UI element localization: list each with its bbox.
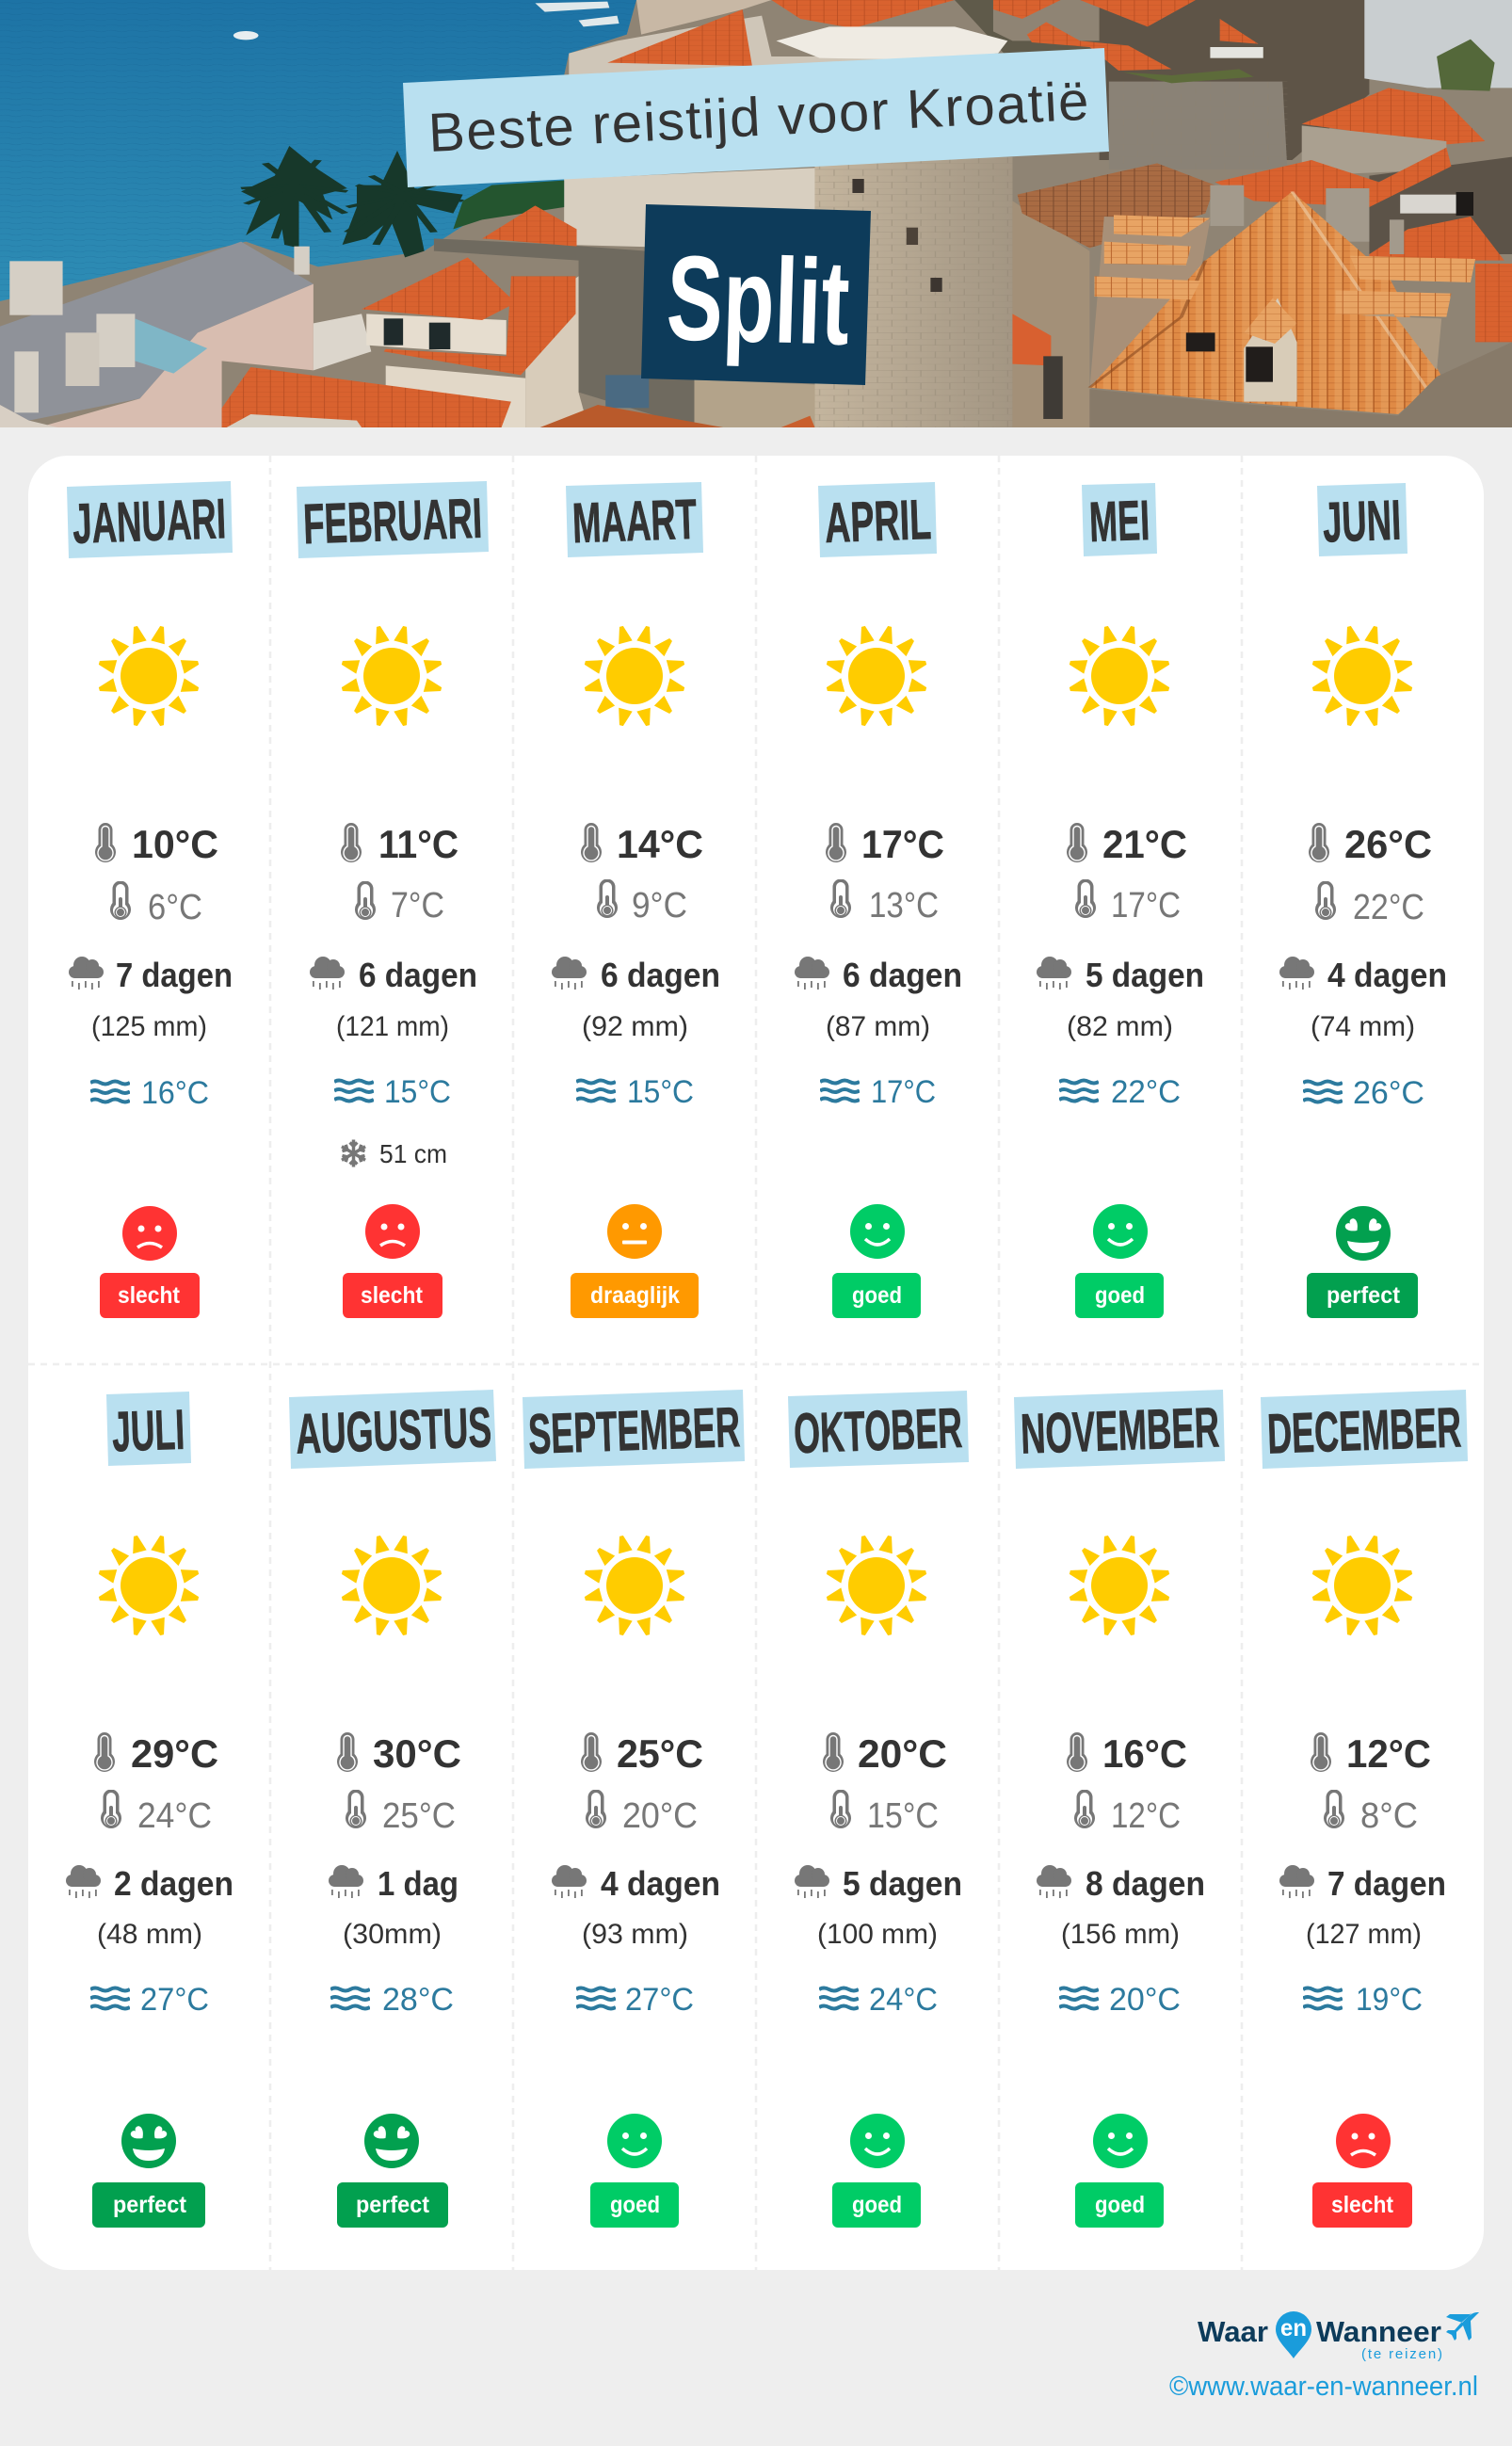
rainfall: (93 mm) [582, 1919, 688, 1950]
city label: Split [641, 204, 871, 385]
sea temperature [1303, 1075, 1424, 1111]
heading: juli [106, 1392, 191, 1466]
rain days: 6 dagen [843, 956, 962, 994]
sea temperature [90, 1075, 209, 1111]
rating: goed [832, 1273, 921, 1318]
rain days: 8 dagen [1086, 1864, 1205, 1903]
icon: happy face [1093, 1204, 1148, 1259]
min temperature [1324, 1789, 1418, 1836]
rating: perfect [92, 2182, 205, 2228]
snow depth: 51 cm [379, 1139, 447, 1168]
rain days: 4 dagen [1327, 956, 1447, 994]
logo: Waar en Wanneer: Wanneer [1316, 2315, 1441, 2348]
rain days: 5 dagen [1086, 956, 1204, 994]
rainfall: (121 mm) [336, 1011, 449, 1042]
rain days [795, 956, 962, 994]
rating: perfect [337, 2182, 448, 2228]
icon: sun [825, 1534, 928, 1637]
rating: slecht [343, 1273, 442, 1318]
min temperature: 13°C [869, 886, 939, 925]
max temperature: 25°C [617, 1731, 703, 1776]
max temperature [341, 822, 458, 866]
rating: slecht: slecht [118, 1282, 181, 1309]
heading: juni [1317, 483, 1407, 556]
logo: Waar en Wanneer: (te reizen) [1361, 2346, 1442, 2362]
month: oktober [788, 1391, 969, 2228]
heading: november: NOVEMBER [1020, 1395, 1220, 1466]
icon: heart-eyes face [364, 2114, 419, 2168]
rating: goed: goed [610, 2192, 660, 2218]
max temperature: 11°C [378, 822, 458, 866]
min temperature [586, 1789, 698, 1836]
month: maart [552, 482, 720, 1318]
icon: sun [97, 1534, 201, 1637]
min temperature: 20°C [622, 1796, 698, 1836]
min temperature: 24°C [137, 1796, 212, 1836]
rainfall: (125 mm) [91, 1011, 207, 1042]
icon: happy face [850, 1204, 905, 1259]
icon: happy face [1093, 2114, 1148, 2168]
sea temperature: 15°C [384, 1074, 451, 1110]
rain days [552, 1864, 720, 1903]
sea temperature: 26°C [1353, 1075, 1424, 1111]
rain days: 6 dagen [359, 956, 477, 994]
min temperature [1315, 881, 1424, 927]
sea temperature: 27°C [140, 1982, 209, 2018]
min temperature [110, 881, 202, 927]
rainfall: (127 mm) [1306, 1919, 1422, 1950]
rainfall: (30mm) [343, 1919, 442, 1950]
icon: happy face [607, 2114, 662, 2168]
max temperature [826, 822, 944, 866]
rainfall: (87 mm) [826, 1011, 930, 1042]
rain days: 7 dagen [116, 956, 233, 994]
sea temperature: 27°C [625, 1982, 694, 2018]
max temperature: 26°C [1344, 822, 1432, 866]
min temperature [355, 881, 444, 925]
sea temperature: 16°C [141, 1075, 209, 1111]
icon: location pin [1276, 2311, 1311, 2358]
rating: goed: goed [852, 2192, 902, 2218]
rating: perfect: perfect [1327, 1282, 1401, 1309]
icon: sun [1311, 624, 1414, 728]
icon: heart-eyes face [121, 2114, 176, 2168]
min temperature: 7°C [391, 886, 444, 925]
heading: januari [67, 481, 233, 558]
icon: sad face [122, 1206, 177, 1261]
rating: slecht [100, 1273, 200, 1318]
rain days [310, 956, 477, 994]
sea temperature [820, 1074, 936, 1110]
rain days: 7 dagen [1327, 1864, 1446, 1903]
min temperature: 17°C [1111, 886, 1181, 925]
icon: sun [340, 1534, 443, 1637]
heading: april [818, 482, 937, 557]
min temperature [1075, 879, 1181, 925]
heading: februari: FEBRUARI [302, 487, 483, 555]
rating: slecht: slecht [361, 1282, 424, 1309]
rating: goed [1075, 1273, 1164, 1318]
rain days: 4 dagen [601, 1864, 720, 1903]
rain days: 6 dagen [601, 956, 720, 994]
rain days [69, 956, 233, 994]
rating: draaglijk [571, 1273, 699, 1318]
min temperature: 9°C [632, 886, 687, 925]
hero photo: aerial view of Split [0, 0, 1512, 427]
max temperature: 14°C [617, 822, 703, 866]
icon: sun [97, 624, 201, 728]
rain days [795, 1864, 962, 1903]
heading: augustus [289, 1390, 496, 1469]
max temperature: 30°C [373, 1731, 461, 1776]
heading: mei: MEI [1088, 489, 1150, 554]
sea temperature [1303, 1982, 1423, 2018]
max temperature [1067, 822, 1187, 866]
min temperature: 22°C [1353, 888, 1424, 927]
sea temperature: 24°C [869, 1982, 938, 2018]
icon: sad face [1336, 2114, 1391, 2168]
sea temperature [576, 1982, 694, 2018]
rain days [1037, 956, 1204, 994]
min temperature [830, 879, 939, 925]
month: juni [1279, 483, 1447, 1318]
rain days [329, 1864, 458, 1903]
heading: oktober [788, 1391, 969, 1468]
icon: heart-eyes face [1336, 1206, 1391, 1261]
sea temperature [334, 1074, 451, 1110]
month: januari [67, 481, 233, 1318]
logo: Waar en Wanneer: Waar [1198, 2315, 1268, 2348]
sea temperature [1059, 1074, 1181, 1110]
month: mei [1037, 483, 1204, 1318]
min temperature: 15°C [867, 1796, 939, 1836]
heading: april: APRIL [824, 488, 932, 555]
rain days [1279, 956, 1447, 994]
rating: goed [590, 2182, 679, 2228]
max temperature [1311, 1731, 1431, 1776]
heading: februari [297, 481, 489, 558]
icon: sun [1068, 624, 1171, 728]
heading: oktober: OKTOBER [793, 1396, 963, 1465]
rating: goed: goed [852, 1282, 902, 1309]
min temperature [346, 1789, 456, 1836]
heading: augustus: AUGUSTUS [295, 1395, 492, 1466]
sea temperature [90, 1982, 209, 2018]
rating: perfect: perfect [113, 2192, 187, 2218]
max temperature: 12°C [1346, 1731, 1431, 1776]
rain days: 1 dag [378, 1864, 458, 1903]
icon: sad face [365, 1204, 420, 1259]
min temperature: 8°C [1360, 1796, 1418, 1836]
rating: goed [1075, 2182, 1164, 2228]
max temperature: 17°C [861, 822, 944, 866]
month: september [523, 1390, 745, 2228]
max temperature: 20°C [858, 1731, 947, 1776]
rainfall: (48 mm) [97, 1919, 202, 1950]
min temperature: 25°C [382, 1796, 456, 1836]
heading: september [523, 1390, 745, 1469]
snow depth [342, 1139, 447, 1168]
logo: Waar en Wanneer: en [1280, 2315, 1307, 2341]
max temperature: 10°C [132, 822, 218, 866]
max temperature [581, 822, 703, 866]
max temperature [581, 1731, 703, 1776]
sea temperature [576, 1074, 694, 1110]
title banner: Beste reistijd voor Kroatië: Beste reistijd voor Kroatië [426, 71, 1090, 164]
icon: sun [583, 624, 686, 728]
heading: juni: JUNI [1322, 489, 1402, 554]
min temperature: 12°C [1111, 1796, 1181, 1836]
rain days [1279, 1864, 1446, 1903]
rating: goed: goed [1095, 2192, 1145, 2218]
rainfall: (82 mm) [1067, 1011, 1173, 1042]
max temperature [95, 822, 218, 866]
month: augustus [289, 1390, 496, 2228]
icon: plane [1446, 2312, 1479, 2341]
rating: perfect [1307, 1273, 1418, 1318]
heading: juli: JULI [111, 1398, 185, 1463]
sea temperature: 28°C [382, 1982, 454, 2018]
icon: sun [340, 624, 443, 728]
sea temperature [330, 1982, 454, 2018]
rating: goed [832, 2182, 921, 2228]
sea temperature: 20°C [1109, 1982, 1181, 2018]
heading: maart [566, 482, 703, 557]
heading: mei [1082, 483, 1157, 556]
sea temperature: 17°C [871, 1074, 936, 1110]
min temperature: 6°C [148, 888, 202, 927]
heading: september: SEPTEMBER [527, 1395, 741, 1466]
min temperature [101, 1789, 212, 1836]
min temperature [830, 1789, 939, 1836]
rain days [1037, 1864, 1205, 1903]
max temperature: 16°C [1102, 1731, 1187, 1776]
max temperature: 21°C [1102, 822, 1187, 866]
heading: november [1014, 1390, 1225, 1469]
rating: goed: goed [1095, 1282, 1145, 1309]
rating: perfect: perfect [356, 2192, 430, 2218]
icon: sun [1311, 1534, 1414, 1637]
rating: slecht: slecht [1331, 2192, 1394, 2218]
rainfall: (100 mm) [817, 1919, 938, 1950]
sea temperature: 15°C [627, 1074, 694, 1110]
logo: Waar en Wanneer [1198, 2311, 1479, 2362]
heading: januari: JANUARI [72, 487, 227, 555]
max temperature: 29°C [131, 1731, 218, 1776]
rainfall: (92 mm) [582, 1011, 688, 1042]
month: december [1261, 1390, 1468, 2228]
month: november [1014, 1390, 1225, 2228]
rating: slecht [1312, 2182, 1412, 2228]
rating: draaglijk: draaglijk [590, 1282, 680, 1309]
rain days: 5 dagen [843, 1864, 962, 1903]
max temperature [1067, 1731, 1187, 1776]
heading: maart: MAART [571, 488, 698, 555]
title banner: Beste reistijd voor Kroatië [403, 48, 1109, 187]
month: april [795, 482, 962, 1318]
sea temperature: 22°C [1111, 1074, 1181, 1110]
panel: calendar card [28, 456, 1484, 2270]
icon: sun [825, 624, 928, 728]
rain days [66, 1864, 233, 1903]
icon: sun [1068, 1534, 1171, 1637]
rain days [552, 956, 720, 994]
icon: happy face [850, 2114, 905, 2168]
month: juli [66, 1392, 233, 2228]
icon: sun [583, 1534, 686, 1637]
icon: neutral face [607, 1204, 662, 1259]
city label: Split: Split [665, 231, 851, 371]
min temperature [597, 879, 687, 925]
min temperature [1074, 1789, 1181, 1836]
rainfall: (156 mm) [1061, 1919, 1180, 1950]
month: februari [297, 481, 489, 1318]
sea temperature: 19°C [1356, 1982, 1423, 2018]
rainfall: (74 mm) [1311, 1011, 1415, 1042]
rain days: 2 dagen [114, 1864, 233, 1903]
website url: ©www.waar-en-wanneer.nl [1169, 2372, 1478, 2402]
sea temperature [819, 1982, 938, 2018]
sea temperature [1059, 1982, 1181, 2018]
